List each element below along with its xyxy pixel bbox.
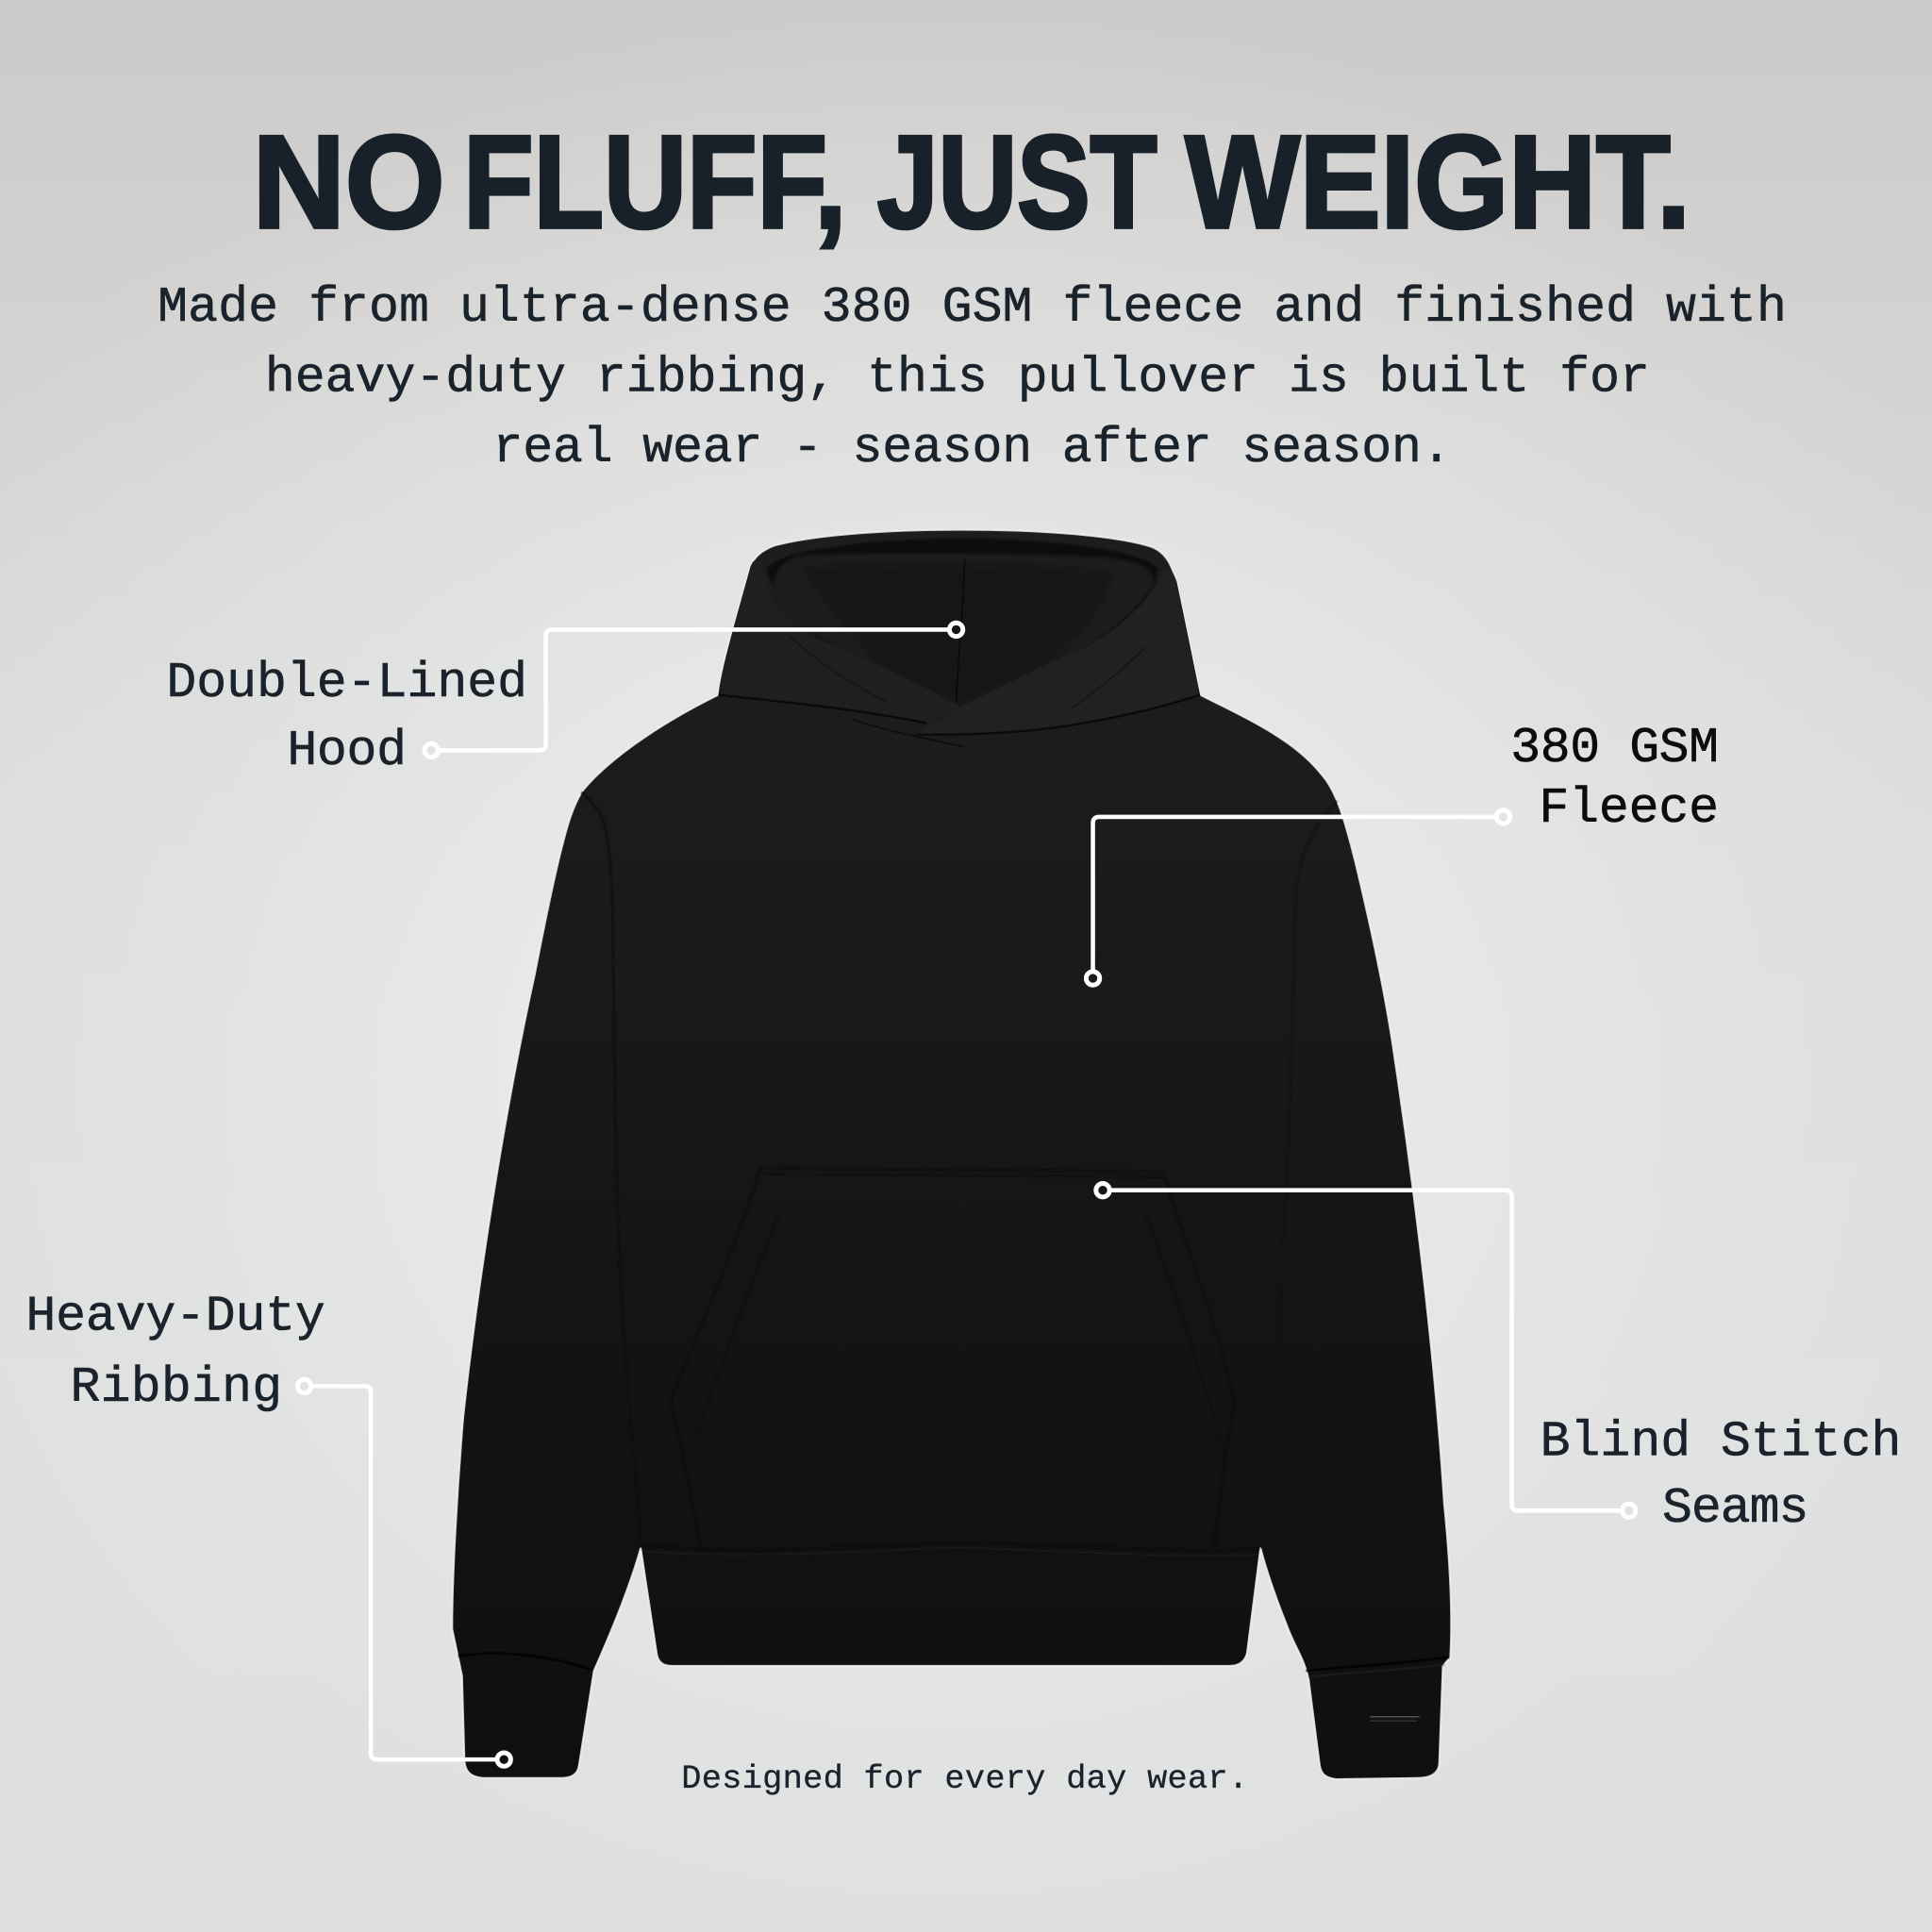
anchor dots [425, 623, 963, 758]
label [1541, 1414, 1901, 1537]
leader line [439, 629, 949, 750]
subtitle text block [158, 279, 1787, 476]
anchor dots [297, 1379, 510, 1766]
leader line [1093, 817, 1494, 971]
label: Ribbing [70, 1359, 282, 1416]
waistband seam [641, 1542, 1259, 1556]
anchor dots [1086, 810, 1510, 985]
label: Double-Lined [166, 655, 527, 711]
hoodie silhouette [452, 530, 1451, 1779]
left hood flap [718, 560, 961, 724]
hood lining, dark top band [766, 539, 1158, 706]
label: Seams [1662, 1480, 1808, 1537]
right hood flap [917, 569, 1200, 735]
sleeve seams [581, 792, 1337, 1547]
callout: blind stitch seams [1096, 1184, 1901, 1537]
callout: 380 gsm fleece [1086, 720, 1719, 985]
label: Fleece [1539, 780, 1719, 837]
hoodie illustration [452, 530, 1451, 1779]
label [166, 655, 527, 779]
title: NO [253, 108, 445, 256]
subtitle text block: heavy-duty ribbing, this pullover is built for [265, 350, 1650, 407]
collar stitching [718, 635, 1200, 747]
label: Blind Stitch [1541, 1414, 1901, 1471]
cuff seams [458, 1654, 1449, 1677]
title: FLUFF, [463, 108, 846, 256]
anchor dots [1096, 1184, 1636, 1517]
label: Hood [287, 723, 407, 779]
hood deep interior [806, 564, 1111, 704]
footer note: Designed for every day wear. [681, 1760, 1248, 1798]
hood inner centre seam [957, 559, 965, 702]
leader line [311, 1386, 496, 1759]
kangaroo pocket [671, 1168, 1235, 1547]
label [1510, 720, 1719, 837]
label [25, 1288, 325, 1416]
title [253, 108, 1690, 256]
callout: heavy-duty ribbing [25, 1288, 510, 1766]
subtitle text block: Made from ultra-dense 380 GSM fleece and finished with [158, 279, 1787, 336]
label: 380 GSM [1510, 720, 1719, 776]
label: Heavy-Duty [25, 1288, 325, 1344]
hood inner roll [772, 553, 1154, 706]
leader line [1110, 1191, 1622, 1510]
title: JUST [877, 108, 1157, 256]
subtitle text block: real wear - season after season. [492, 420, 1452, 476]
cuff tag [1370, 1716, 1420, 1722]
callout: double-lined hood [166, 623, 963, 779]
title: WEIGHT. [1185, 108, 1690, 256]
